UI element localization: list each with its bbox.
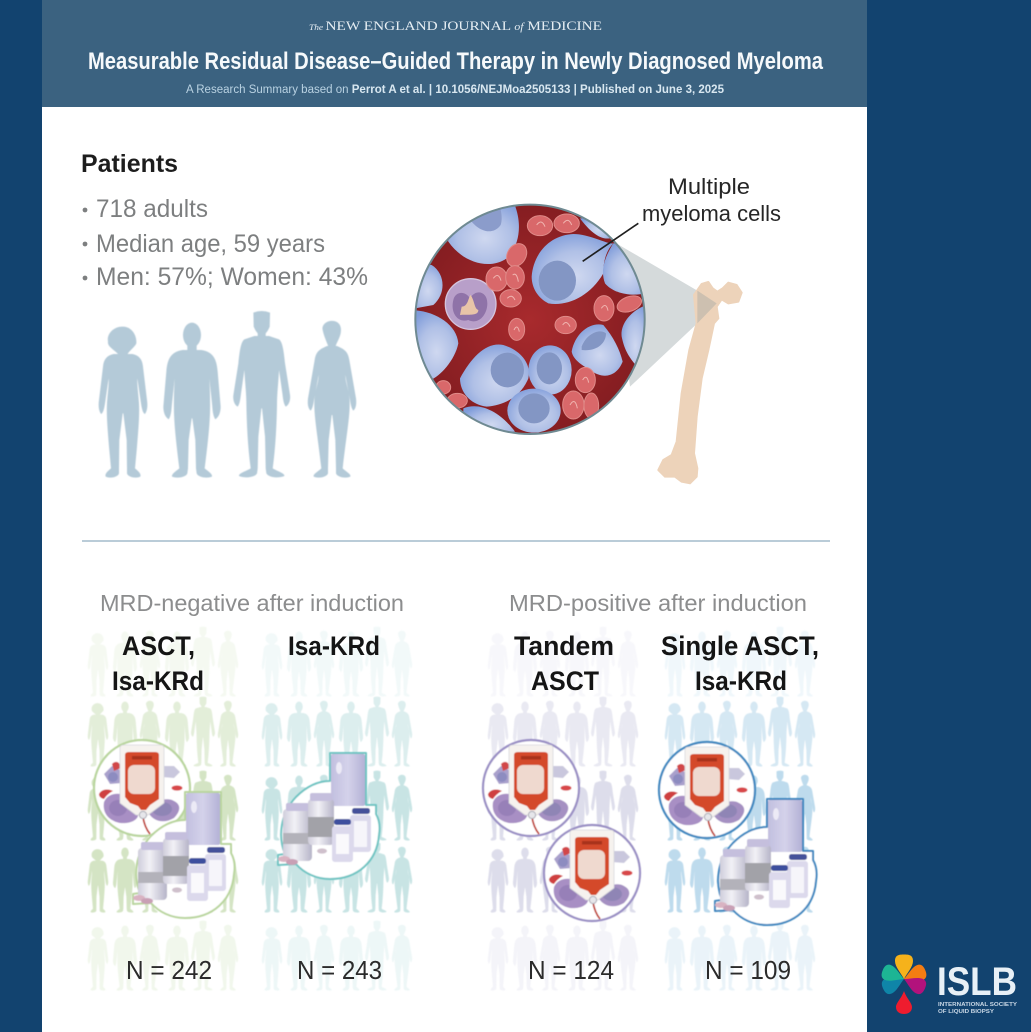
icon: medications <box>133 792 235 918</box>
label: multiple myeloma cells: Multiple <box>668 174 750 199</box>
icon: stem cell bag 1 <box>483 740 579 836</box>
patient facts list: 718 adults <box>96 195 208 223</box>
logo tagline: INTERNATIONAL SOCIETY <box>938 1002 1017 1008</box>
arm heading: Isa-KRd <box>112 666 204 696</box>
leader line <box>583 223 638 261</box>
logo tagline <box>938 1002 1017 1015</box>
panel: patients <box>81 150 368 478</box>
sample size: N = 124 <box>528 955 614 985</box>
label: multiple myeloma cells: myeloma cells <box>642 201 781 226</box>
icon: stem cell bag <box>94 740 190 836</box>
arm heading: Isa-KRd <box>695 666 787 696</box>
icon: medications <box>715 799 817 925</box>
arm heading <box>514 631 614 696</box>
journal name: The NEW ENGLAND JOURNAL of MEDICINE <box>309 18 602 33</box>
lens rim <box>415 205 645 434</box>
patient facts list <box>83 195 368 291</box>
arm heading: ASCT <box>531 666 599 696</box>
group: Single ASCT, Isa-KRd <box>659 627 819 991</box>
group: ASCT, Isa-KRd <box>88 627 238 991</box>
arm heading <box>661 631 819 696</box>
label: multiple myeloma cells <box>642 174 781 226</box>
arm heading: Isa-KRd <box>288 631 380 661</box>
patient facts list: Men: 57%; Women: 43% <box>96 263 368 291</box>
header banner <box>42 0 867 107</box>
crowd: lavender <box>488 627 638 991</box>
icon: medications <box>278 753 380 879</box>
section heading: MRD-positive: MRD-positive after induction <box>509 590 807 616</box>
group: Isa-KRd <box>262 627 412 991</box>
icon: stem cell bag <box>659 742 755 838</box>
sample size: N = 109 <box>705 955 791 985</box>
heading: patients: Patients <box>81 150 178 178</box>
icon: stem cell bag 2 <box>544 825 640 921</box>
arm heading <box>112 631 204 696</box>
patient silhouettes <box>99 311 356 478</box>
illustration: myeloma cells in bone marrow <box>410 200 742 483</box>
arm heading: Tandem <box>514 631 614 661</box>
arm heading: ASCT, <box>122 631 195 661</box>
logo petals <box>880 954 928 1014</box>
citation: A Research Summary based on Perrot A et al. | 10.1056/NEJMoa2505133 | Published on June 3, 2025 <box>186 84 725 96</box>
magnified cells <box>410 200 650 440</box>
logo tagline: OF LIQUID BIOPSY <box>938 1009 994 1015</box>
crowd: blue <box>665 627 815 991</box>
title: Measurable Residual Disease–Guided Therapy in Newly Diagnosed Myeloma <box>88 48 824 75</box>
arm heading: Single ASCT, <box>661 631 819 661</box>
section heading: MRD-negative: MRD-negative after induction <box>100 590 404 616</box>
crowd: green <box>88 627 238 991</box>
magnification cone <box>613 242 717 387</box>
femur bone <box>658 282 742 483</box>
logo: ISLB <box>880 954 1017 1015</box>
group: Tandem ASCT <box>483 627 640 991</box>
patient facts list: Median age, 59 years <box>96 230 325 258</box>
crowd: teal <box>262 627 412 991</box>
sample size: N = 242 <box>126 955 212 985</box>
logo wordmark: ISLB <box>937 960 1017 1004</box>
sample size: N = 243 <box>297 955 382 985</box>
